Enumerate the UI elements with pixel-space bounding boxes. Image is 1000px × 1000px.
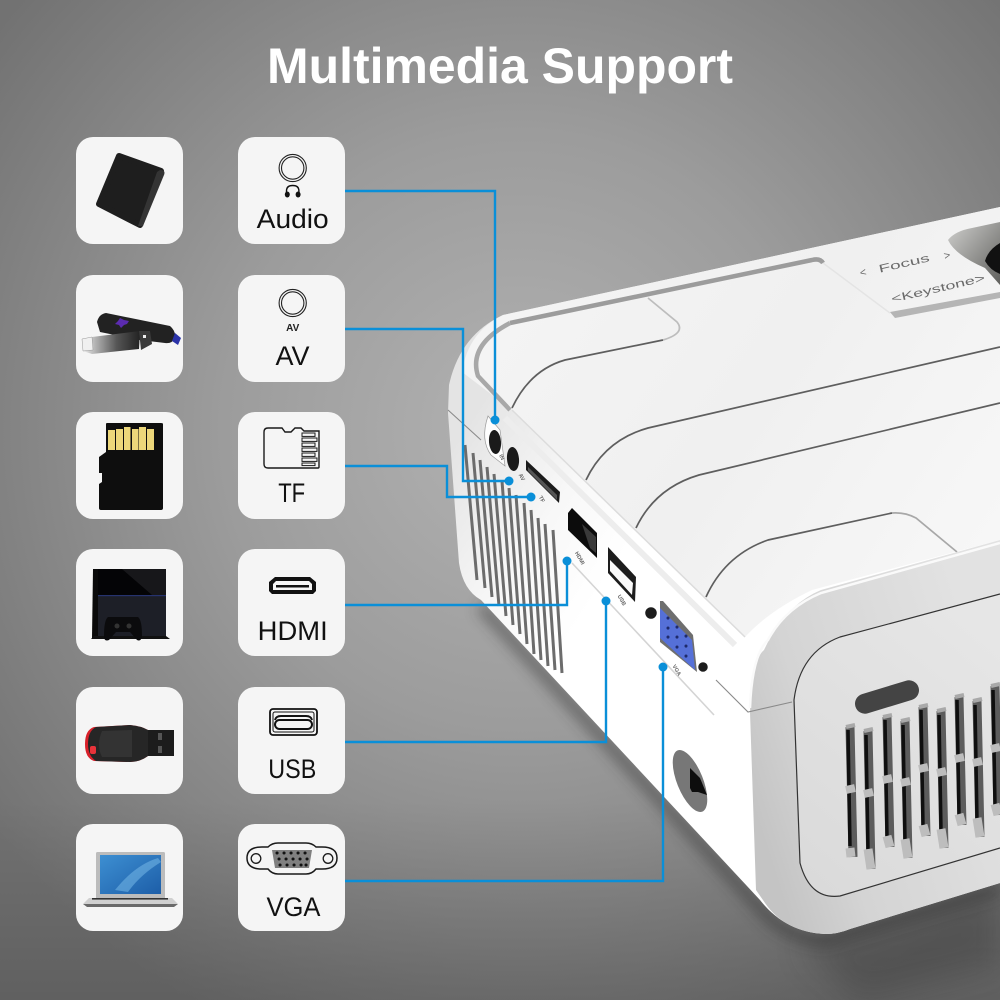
tf slot — [526, 460, 560, 503]
vga icon — [247, 843, 337, 874]
side vents — [465, 445, 562, 673]
audio label: Audio — [257, 204, 329, 234]
vga label: VGA — [266, 892, 320, 922]
usb icon — [270, 709, 317, 735]
port labels: USB — [616, 594, 627, 607]
top surface — [462, 207, 1000, 637]
front vents — [846, 684, 1000, 869]
controller — [104, 617, 142, 640]
connector: audio — [345, 191, 500, 424]
device card: streaming stick — [76, 275, 183, 382]
gold contacts — [108, 427, 154, 450]
port labels: IN — [497, 454, 505, 461]
port labels: VGA — [671, 664, 682, 677]
keystone label: <Keystone> — [890, 272, 986, 306]
focus label — [859, 249, 952, 280]
projector shadow — [481, 606, 1000, 1000]
port card: usb — [238, 687, 345, 794]
device card: game console — [76, 549, 183, 656]
port labels — [497, 454, 682, 677]
av jack icon: AV — [286, 323, 300, 334]
lens recess — [948, 222, 1000, 285]
connector: hdmi — [345, 556, 572, 605]
front face — [750, 540, 1000, 934]
port labels: HDMI — [573, 551, 585, 566]
port card: audio — [238, 137, 345, 244]
audio jack icon — [279, 154, 306, 198]
top panel groove — [510, 259, 823, 323]
hdmi label: HDMI — [258, 616, 328, 646]
connector: vga — [345, 662, 668, 881]
top surface curved grooves — [512, 298, 1000, 597]
hdmi icon — [269, 577, 316, 594]
front panel — [794, 594, 1000, 896]
projector — [448, 207, 1000, 934]
connector: av — [345, 329, 514, 486]
device card: usb flash drive — [76, 687, 183, 794]
connector: tf — [345, 466, 536, 502]
port card: av — [238, 275, 345, 382]
focus label: Focus — [878, 252, 932, 276]
title: Multimedia Support — [267, 38, 733, 94]
usb port — [608, 547, 636, 602]
device card: tv box — [76, 137, 183, 244]
top panel groove corner — [476, 323, 510, 410]
port labels: TF — [537, 495, 546, 504]
device card: micro sd card — [76, 412, 183, 519]
audio jack — [485, 416, 505, 466]
focus label: < — [859, 266, 868, 280]
usb label: USB — [268, 754, 316, 784]
projector body — [448, 207, 1000, 934]
tf card icon — [264, 428, 319, 468]
vga port — [644, 601, 709, 673]
body seams — [448, 410, 792, 712]
lens — [985, 243, 1000, 274]
control panel recess — [823, 263, 890, 313]
port card: vga — [238, 824, 345, 931]
focus label: > — [943, 249, 952, 263]
device card: laptop — [76, 824, 183, 931]
front shoulder highlight — [750, 543, 1000, 708]
tf label: TF — [278, 478, 305, 508]
port card: hdmi — [238, 549, 345, 656]
front panel outline — [794, 594, 1000, 896]
port card: tf — [238, 412, 345, 519]
av jack — [506, 447, 520, 471]
bottom mount hole — [666, 746, 714, 816]
av label: AV — [276, 341, 310, 371]
indicator window — [853, 678, 921, 716]
hdmi port — [568, 508, 597, 558]
ridge strip highlight — [512, 410, 745, 637]
connector: usb — [345, 596, 610, 742]
port labels: AV — [517, 473, 526, 482]
